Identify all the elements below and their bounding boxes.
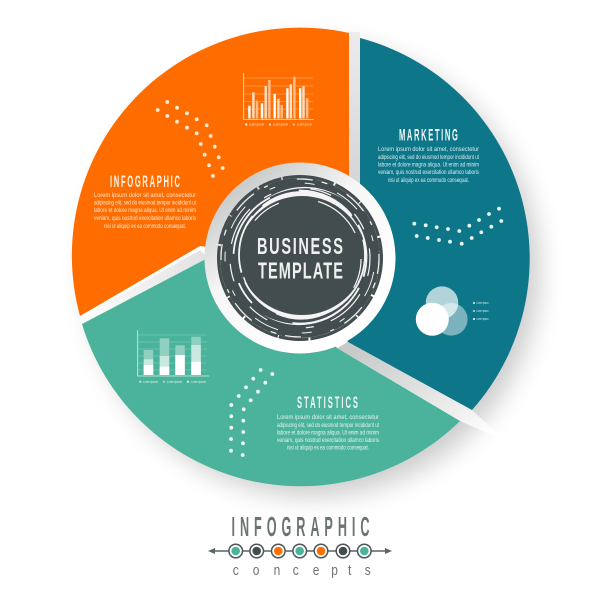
text block: marketing: adipiscing elit, sed do eiusmod tempor incididunt ut bbox=[378, 154, 479, 161]
dark brush circle bbox=[218, 176, 382, 340]
panel: infographic (orange) bbox=[72, 28, 349, 316]
chart legend: orange: Lorem ipsum bbox=[249, 123, 264, 127]
text block: statistics: Lorem ipsum dolor sit amet, consectetur bbox=[277, 414, 379, 421]
chart legend: orange: Lorem ipsum bbox=[273, 123, 288, 127]
text block: infographic: Lorem ipsum dolor sit amet, consectetur bbox=[94, 192, 196, 199]
panel: marketing (teal) bbox=[300, 38, 530, 410]
dotted curve: teal bbox=[412, 207, 503, 246]
chart legend: orange: Lorem ipsum bbox=[297, 123, 312, 127]
venn diagram bbox=[416, 286, 468, 336]
text block: marketing bbox=[378, 146, 479, 184]
timeline nodes bbox=[229, 544, 371, 558]
timeline bbox=[208, 544, 392, 558]
text block: statistics: adipiscing elit, sed do eiusmod tempor incididunt ut bbox=[277, 422, 379, 429]
white ring bbox=[204, 162, 396, 354]
white brush strokes bbox=[221, 179, 379, 337]
bar chart: green bbox=[138, 330, 209, 384]
tapered brush crescents bbox=[242, 187, 362, 325]
pie drop shadow bbox=[72, 30, 539, 496]
panel: statistics (green) bbox=[82, 260, 460, 486]
arrow heads bbox=[208, 548, 392, 554]
text block: infographic: labore et dolore magna aliqua. Ut enim ad minim bbox=[94, 207, 196, 214]
venn legend bbox=[473, 301, 489, 321]
heading: infographic: INFOGRAPHIC bbox=[110, 172, 180, 191]
text block: infographic: veniam, quis nostrud exercitation ullamco laboris bbox=[94, 215, 196, 222]
tail shadow between teal and green bbox=[337, 342, 506, 441]
chart legend: green: Lorem ipsum bbox=[191, 380, 206, 384]
text block: statistics bbox=[277, 414, 379, 452]
green segment bbox=[82, 260, 460, 486]
text block: marketing: veniam, quis nostrud exercitation ullamco laboris bbox=[378, 169, 479, 176]
centre badge bbox=[204, 162, 396, 354]
orange segment bbox=[72, 28, 349, 316]
heading: marketing: MARKETING bbox=[399, 125, 458, 144]
chart legend: green bbox=[139, 380, 206, 384]
bar chart: orange bbox=[244, 73, 314, 127]
text block: statistics: veniam, quis nostrud exercitation ullamco laboris bbox=[277, 437, 379, 444]
dotted curve: orange bbox=[156, 100, 225, 178]
badge title: TEMPLATE bbox=[258, 258, 343, 285]
badge title bbox=[257, 234, 343, 285]
text block: marketing: labore et dolore magna aliqua. Ut enim ad minim bbox=[378, 161, 479, 168]
text block: statistics: nisi ut aliquip ex ea commodo consequat. bbox=[287, 444, 369, 452]
footer title: INFOGRAPHIC bbox=[232, 512, 370, 542]
chart legend: green: Lorem ipsum bbox=[143, 380, 158, 384]
footer subtitle: concepts bbox=[233, 562, 371, 578]
venn legend: Lorem ipsum bbox=[476, 309, 489, 313]
heading: statistics: STATISTICS bbox=[297, 393, 358, 412]
text block: marketing: Lorem ipsum dolor sit amet, consectetur bbox=[378, 146, 479, 153]
chart legend: green: Lorem ipsum bbox=[167, 380, 182, 384]
venn legend: Lorem ipsum bbox=[476, 301, 489, 305]
text block: infographic: adipiscing elit, sed do eiusmod tempor incididunt ut bbox=[94, 200, 196, 206]
badge title: BUSINESS bbox=[257, 234, 343, 260]
text block: infographic: nisi ut aliquip ex ea commodo consequat. bbox=[104, 223, 186, 230]
text block: marketing: nisi ut aliquip ex ea commodo consequat. bbox=[388, 177, 469, 184]
text block: statistics: labore et dolore magna aliqua. Ut enim ad minim bbox=[277, 429, 379, 436]
chart legend: orange bbox=[245, 123, 312, 127]
dotted curve: green bbox=[229, 368, 274, 457]
teal segment bbox=[300, 38, 530, 410]
arrow line bbox=[213, 550, 387, 552]
text block: infographic bbox=[94, 192, 196, 230]
venn legend: Lorem ipsum bbox=[476, 317, 489, 321]
